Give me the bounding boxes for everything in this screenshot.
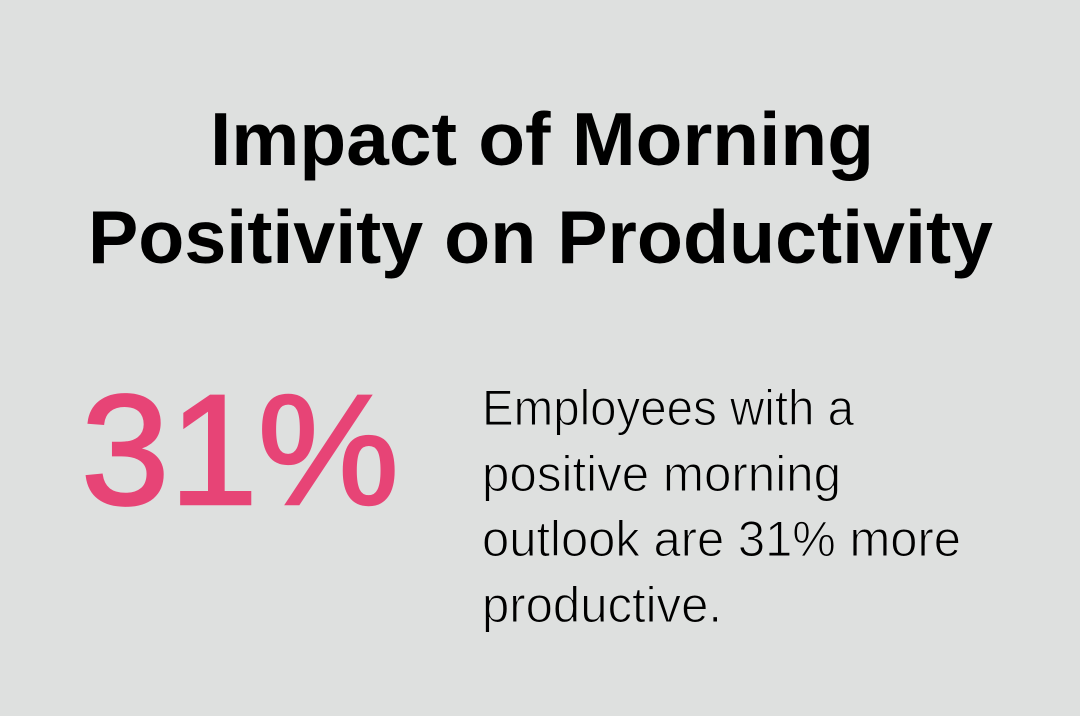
title: Impact of Morning — [210, 97, 874, 181]
title — [88, 97, 993, 279]
description text — [482, 380, 961, 633]
big stat: 31%: 31% — [81, 363, 399, 538]
title: Positivity on Productivity — [88, 195, 993, 279]
description text: outlook are 31% more — [482, 511, 961, 567]
description text: productive. — [482, 577, 722, 633]
description text: positive morning — [482, 446, 841, 502]
description text: Employees with a — [482, 380, 854, 436]
